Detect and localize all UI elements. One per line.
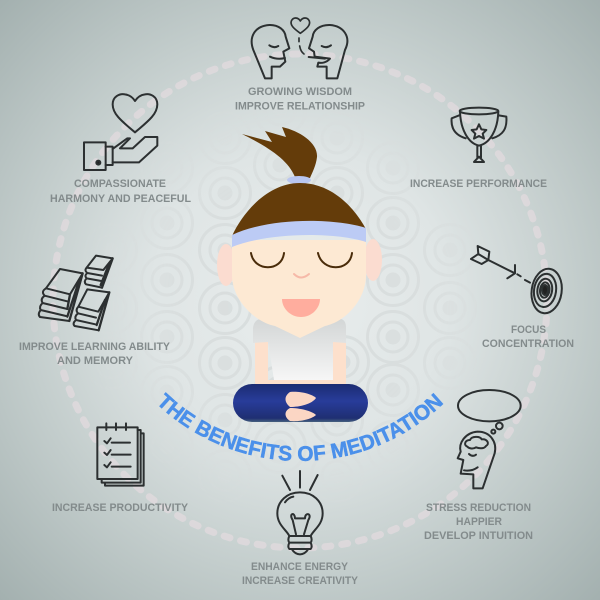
ear right (364, 239, 382, 281)
label: COMPASSIONATE (74, 178, 166, 190)
closed eyes (251, 253, 352, 267)
label (50, 178, 191, 205)
icon: light bulb (277, 471, 323, 554)
label: FOCUS (511, 324, 546, 336)
item: compassion (50, 94, 191, 205)
title: THE BENEFITS OF MEDITATION (159, 392, 444, 462)
dotted circle (53, 54, 547, 548)
label: STRESS REDUCTION (426, 502, 531, 514)
label (242, 561, 359, 587)
arms (255, 340, 346, 390)
face (232, 240, 366, 338)
item: focus (471, 246, 574, 350)
label (235, 86, 365, 112)
crossed legs (233, 384, 368, 422)
icon: checklist (97, 423, 144, 486)
label: HARMONY AND PEACEFUL (50, 193, 191, 205)
label: ENHANCE ENERGY (251, 561, 349, 573)
item: energy (242, 471, 359, 587)
label: HAPPIER (456, 516, 502, 528)
label: IMPROVE LEARNING ABILITY (19, 341, 171, 353)
mouth (282, 299, 320, 317)
item: performance (410, 108, 547, 190)
hair tie (287, 176, 311, 184)
icon: two faces and heart (252, 18, 347, 78)
label: INCREASE PERFORMANCE (410, 178, 547, 190)
item: productivity (52, 423, 189, 514)
label (424, 502, 533, 542)
item: stress reduction (424, 390, 533, 542)
label: AND MEMORY (57, 355, 134, 367)
label: INCREASE PRODUCTIVITY (52, 502, 189, 514)
item: learning (19, 256, 171, 367)
label: IMPROVE RELATIONSHIP (235, 100, 365, 112)
item: relationship (235, 18, 365, 112)
headband (232, 221, 366, 247)
nose (294, 274, 309, 278)
label (19, 341, 171, 367)
label: CONCENTRATION (482, 338, 574, 350)
ponytail (242, 127, 317, 178)
feet (286, 392, 316, 421)
label: GROWING WISDOM (248, 86, 352, 98)
meditating character (217, 127, 382, 422)
icon: trophy (452, 108, 506, 162)
concentric ring pattern (172, 173, 429, 428)
label: INCREASE CREATIVITY (242, 575, 359, 587)
icon: arrow and target (471, 246, 565, 315)
label: DEVELOP INTUITION (424, 530, 533, 542)
icon: thinking head (458, 390, 521, 488)
icon: heart in hand (84, 94, 157, 170)
shirt (253, 319, 346, 380)
ear left (217, 244, 235, 286)
hair (232, 183, 366, 236)
icon: books (39, 256, 113, 330)
label (482, 324, 574, 350)
